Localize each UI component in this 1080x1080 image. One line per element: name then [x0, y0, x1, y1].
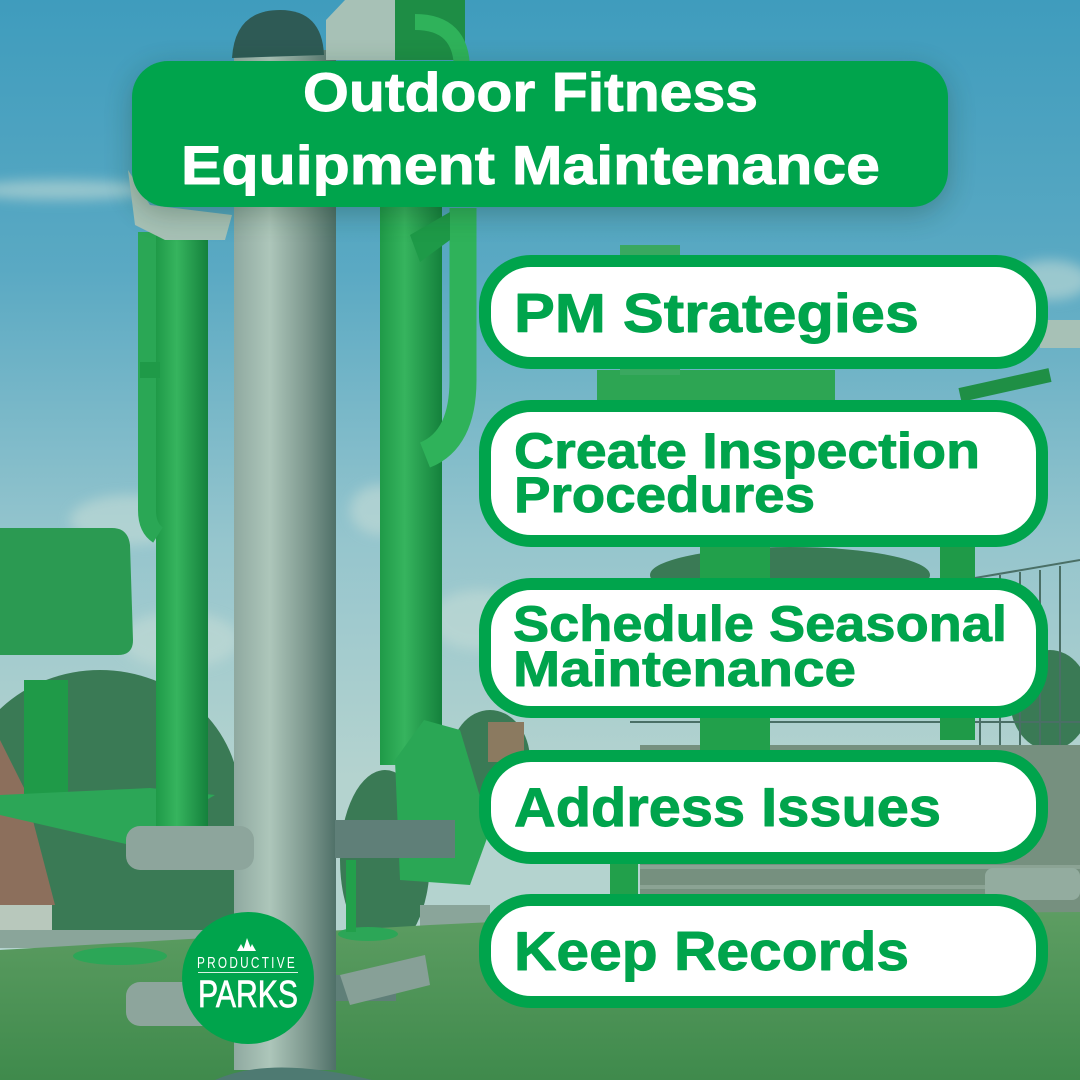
- pill: Schedule Seasonal Maintenance: Schedule Seasonal: [513, 596, 1007, 652]
- tall central grey pole: [215, 0, 395, 1080]
- left green tubes: [128, 170, 232, 840]
- railing fence: [630, 560, 1080, 745]
- pill: Address Issues: [485, 756, 1042, 858]
- pill: Schedule Seasonal Maintenance: Maintenance: [513, 641, 856, 697]
- pill: Keep Records: [485, 900, 1042, 1002]
- logo: Productive Parks badge: PARKS: [198, 974, 298, 1016]
- far building and chimney: [488, 722, 524, 762]
- pill: PM Strategies: PM Strategies: [514, 282, 919, 344]
- title line 1: Outdoor Fitness: [303, 61, 758, 123]
- low fence: [0, 930, 240, 948]
- left seat panel: [0, 528, 215, 845]
- pill: Keep Records: Keep Records: [514, 920, 909, 982]
- pill: Address Issues: Address Issues: [514, 776, 941, 838]
- green rear equipment at right: [597, 245, 1080, 920]
- pill: Create Inspection Procedures: [485, 406, 1042, 541]
- title banner: [132, 61, 948, 214]
- logo: Productive Parks badge: [182, 912, 314, 1044]
- lawn: [0, 912, 1080, 1080]
- pill: PM Strategies: [485, 261, 1042, 363]
- brick wall: [640, 745, 1080, 915]
- grey handlebars: [73, 820, 455, 1026]
- title line 2: Equipment Maintenance: [181, 134, 880, 196]
- trees: [0, 547, 1080, 950]
- pill: Create Inspection Procedures: Create Inspection: [514, 423, 980, 479]
- icon: trees: [237, 938, 256, 951]
- green right tubes and handle: [380, 0, 490, 885]
- house roof: [0, 740, 55, 905]
- pill: Create Inspection Procedures: Procedures: [514, 467, 815, 523]
- pill: Schedule Seasonal Maintenance: [485, 584, 1042, 712]
- logo: Productive Parks badge: PRODUCTIVE: [197, 955, 297, 972]
